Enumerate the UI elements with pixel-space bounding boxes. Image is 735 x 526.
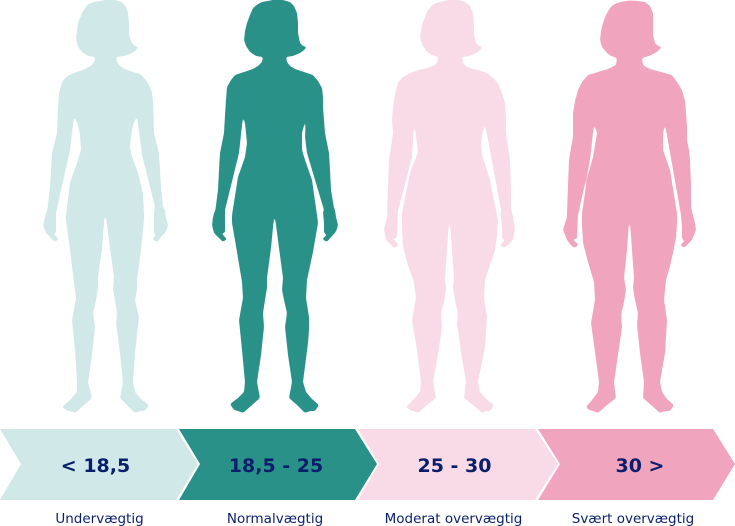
arrow: under 18,5 — [0, 429, 198, 500]
arrow: 25 to 30 — [358, 429, 558, 500]
value: 30 and above: 30 > — [616, 455, 664, 477]
figure: moderately overweight silhouette — [384, 0, 515, 413]
value: 25 to 30: 25 - 30 — [418, 455, 492, 477]
arrow: 18,5 to 25 — [179, 429, 377, 500]
value: under 18,5: < 18,5 — [61, 455, 130, 477]
figure: normal weight silhouette — [212, 0, 338, 413]
value: 18,5 to 25: 18,5 - 25 — [229, 455, 323, 477]
arrow: 30 and above — [538, 429, 735, 500]
figure: underweight silhouette — [43, 0, 168, 413]
figure: severely overweight silhouette — [563, 0, 696, 413]
